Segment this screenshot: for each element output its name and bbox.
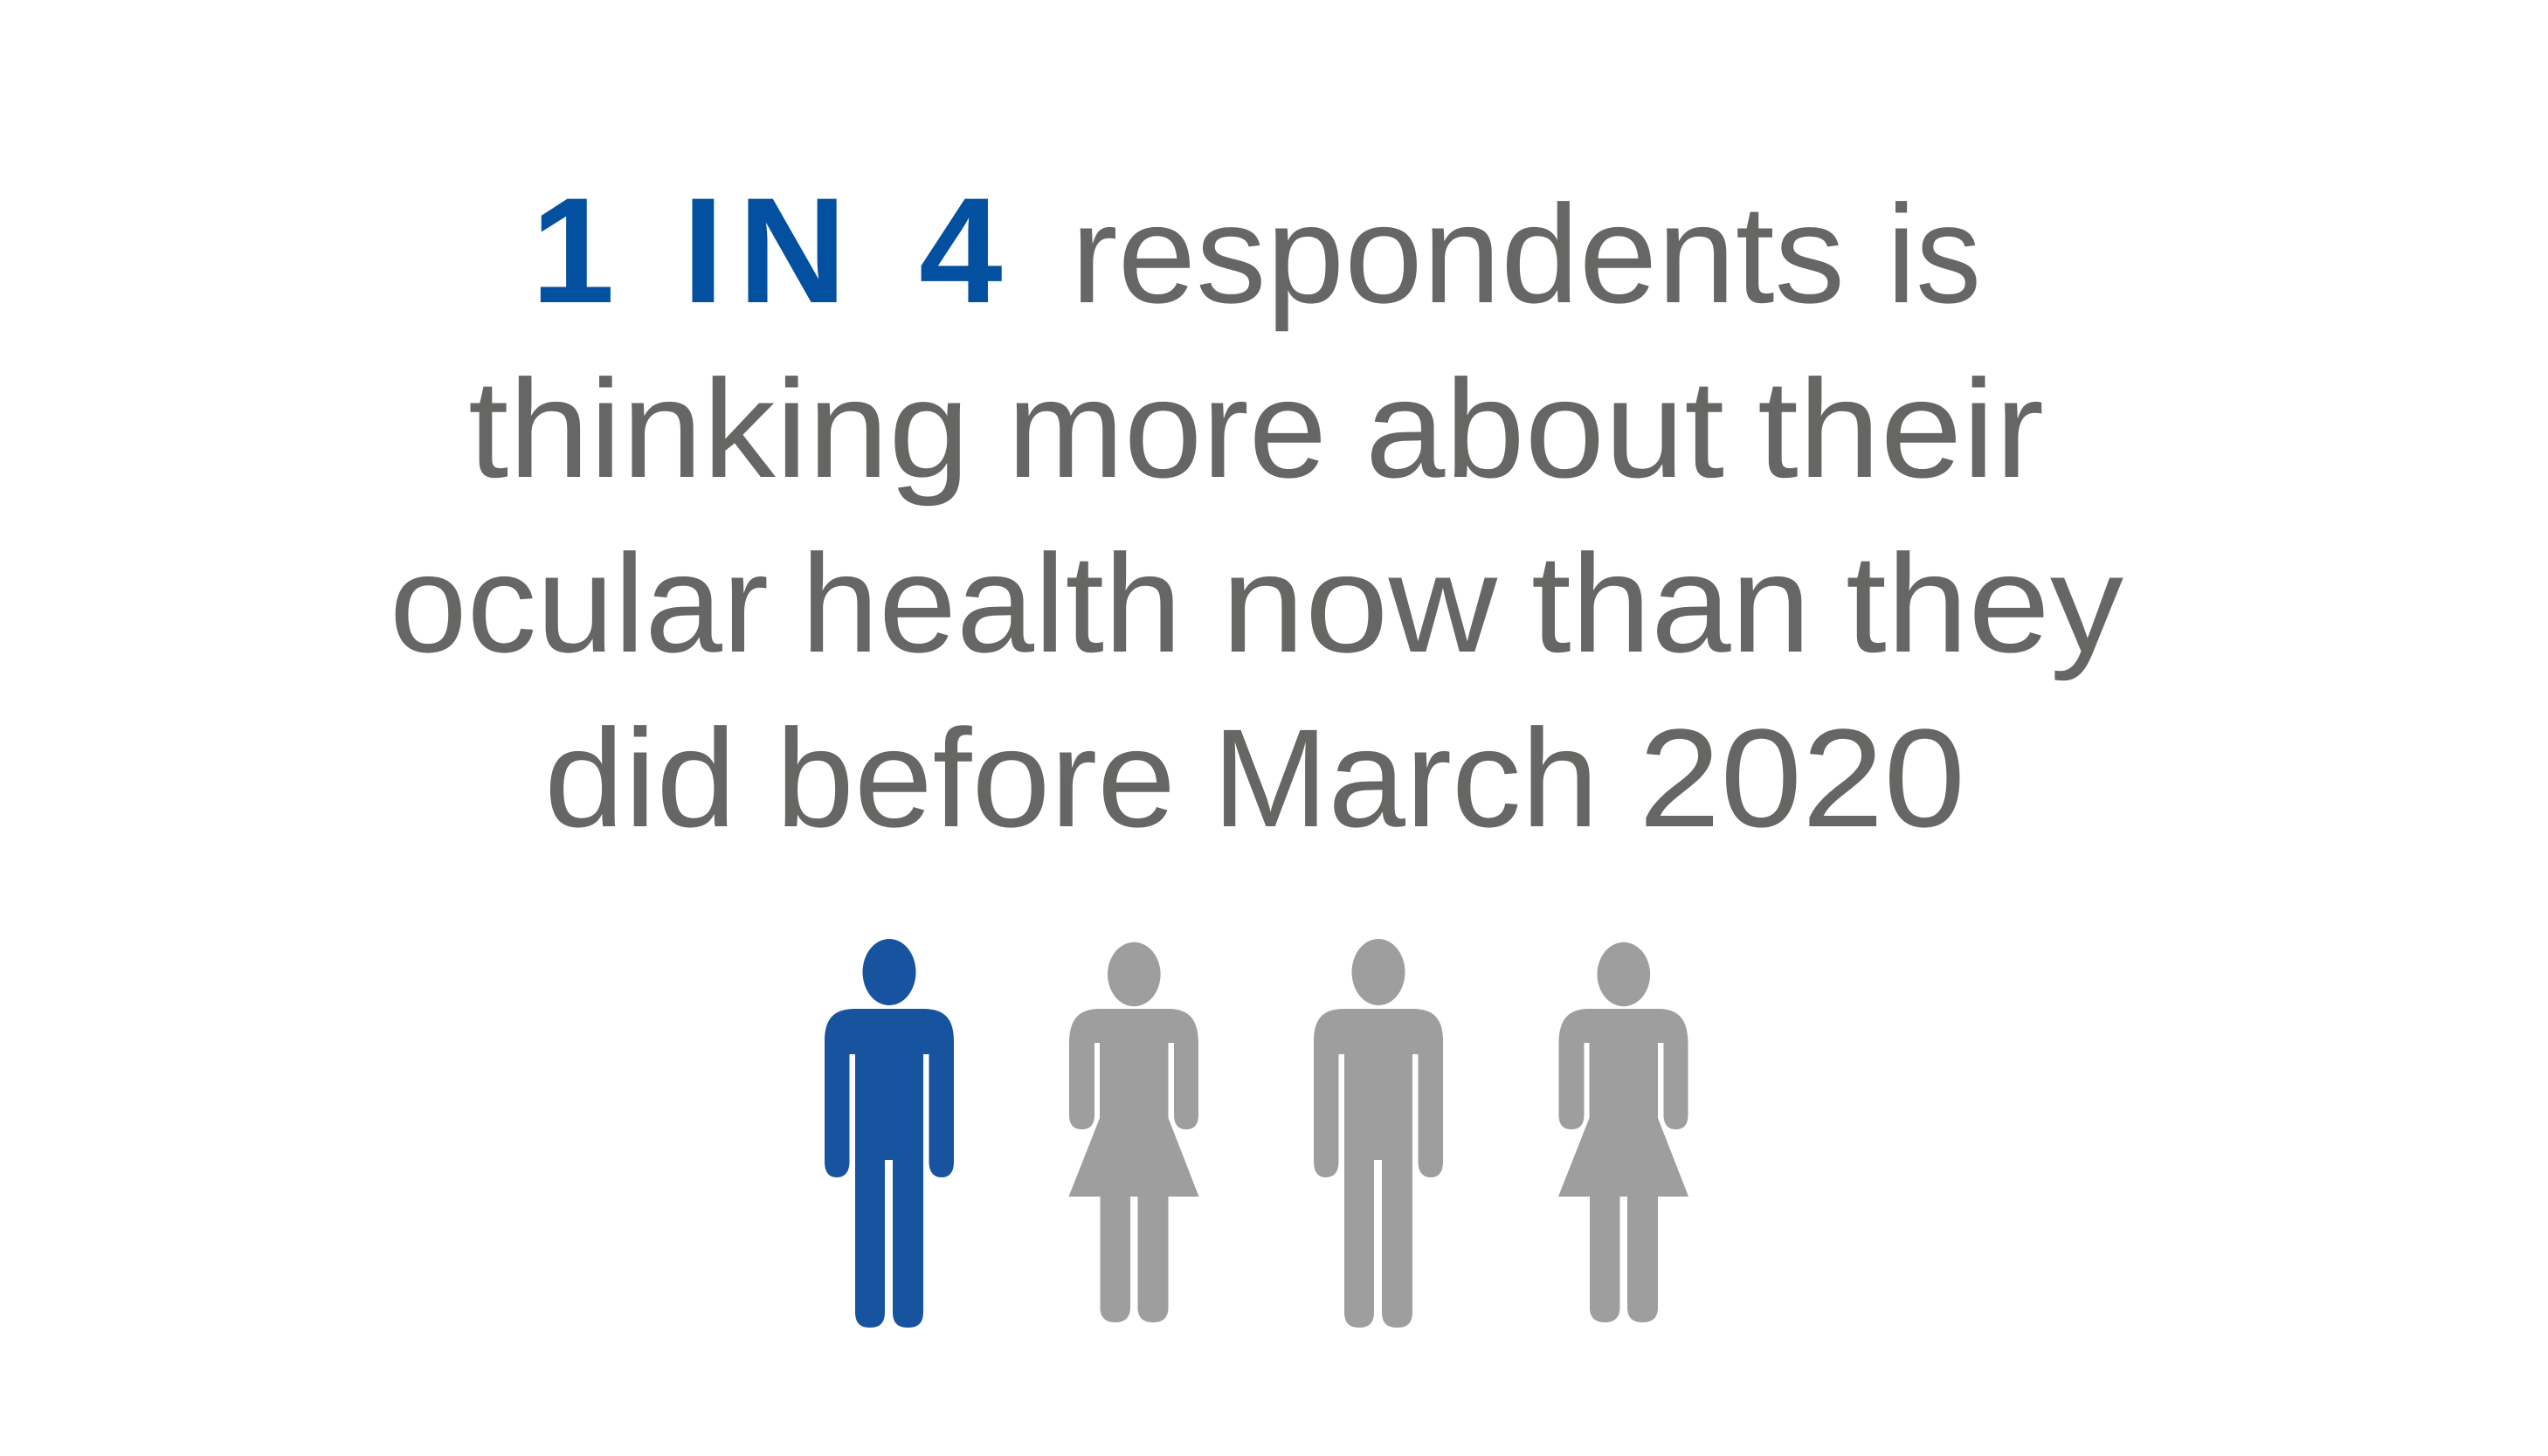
highlighted statistic: 1 IN 4: 1 IN 4 [531,167,1003,335]
line 3: ocular [390,525,769,681]
line 3: health [801,525,1182,681]
line 2: about [1365,350,1724,507]
icon: man, blue [825,939,954,1328]
line 3: than [1531,525,1811,681]
icon: woman, grey [1558,942,1688,1322]
line 2 [468,350,2044,507]
line 2: more [1007,350,1327,507]
icon: woman, grey [1069,942,1198,1322]
line 4: before [776,700,1176,856]
line 1: respondents [1071,176,1845,332]
headline text [390,167,2123,856]
line 2: thinking [468,350,970,507]
line 1: is [1887,176,1981,332]
line 4: did [544,700,736,856]
line 4: 2020 [1639,700,1965,856]
line 2: their [1757,350,2044,507]
line 3: they [1846,525,2123,681]
line 3: now [1221,525,1497,681]
line 4: March [1212,700,1599,856]
line 3 [390,525,2123,681]
line 4 [544,700,1965,856]
icon: man, grey [1314,939,1443,1328]
pictogram row: 1 of 4 highlighted [825,939,1688,1328]
